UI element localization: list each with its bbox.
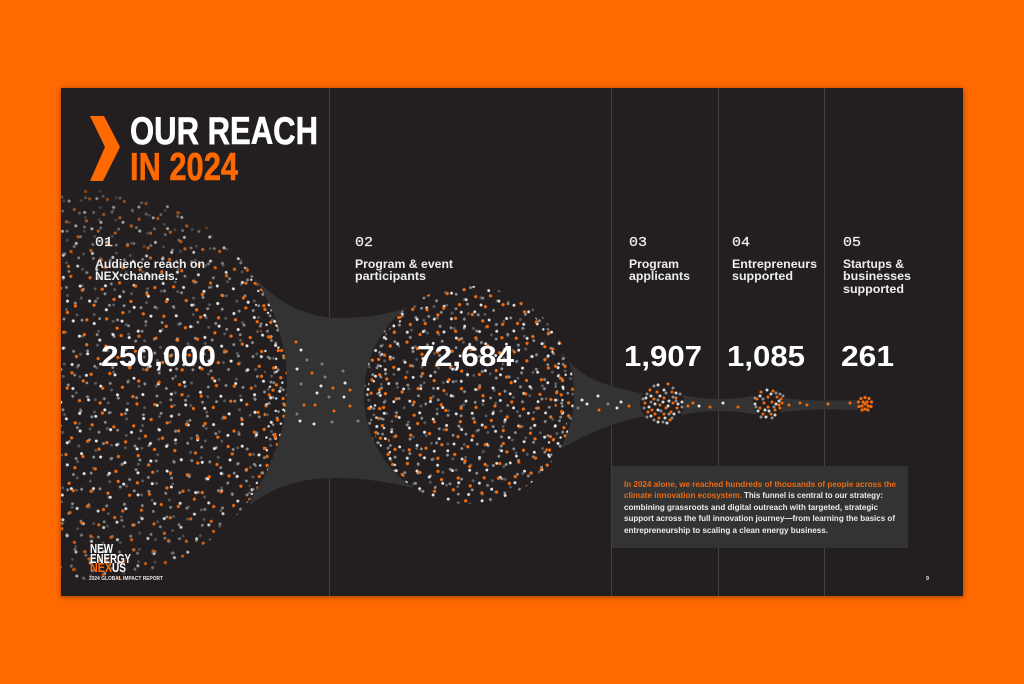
cluster 5: startups supported	[858, 398, 872, 410]
logo: New Energy Nexus: NEX	[90, 560, 112, 575]
cluster 1: audience reach	[61, 190, 287, 580]
figures: 261	[841, 341, 894, 373]
callout panel: This funnel is central to our strategy:	[744, 491, 883, 500]
column 04 label	[732, 235, 817, 283]
figures: 250,000	[101, 341, 216, 373]
column 04 label: supported	[732, 269, 793, 283]
column 01 label	[95, 235, 205, 283]
figures	[101, 341, 894, 373]
figures: 72,684	[417, 341, 514, 373]
column 03 label: applicants	[629, 269, 690, 283]
column 05 label: supported	[843, 282, 904, 296]
figures: 1,085	[727, 341, 805, 373]
footer: page number: 9	[926, 576, 929, 582]
column 02 label: participants	[355, 269, 426, 283]
logo: New Energy Nexus: NEW	[90, 541, 114, 556]
chart: funnel dot clusters	[61, 190, 574, 580]
column 03 label	[629, 235, 690, 283]
column 05 label: Startups &	[843, 257, 904, 271]
column 02 label: Program & event	[355, 257, 453, 271]
dark report panel	[61, 88, 963, 596]
column 01 label: NEX channels.	[95, 269, 178, 283]
figures: 1,907	[624, 341, 702, 373]
callout panel	[612, 466, 908, 548]
column 05 label: businesses	[843, 269, 911, 283]
logo: New Energy Nexus: US	[112, 560, 126, 575]
infographic page	[57, 85, 967, 601]
logo: New Energy Nexus	[90, 541, 131, 575]
cluster 3: program applicants	[640, 381, 684, 425]
dots between clusters 1 and 2	[296, 342, 358, 424]
dots along narrow funnel	[578, 396, 850, 410]
funnel shape	[250, 280, 858, 505]
title	[130, 110, 318, 189]
title: OUR REACH	[130, 110, 318, 153]
column 04 label: Entrepreneurs	[732, 257, 817, 271]
column 03 label: 03	[629, 235, 647, 251]
column 05 label: 05	[843, 235, 861, 251]
logo: New Energy Nexus: ENERGY	[90, 551, 131, 566]
cluster 4: entrepreneurs supported	[753, 388, 783, 418]
column 02 label	[355, 235, 453, 283]
callout panel: support across the full innovation journey—from learning the basics of	[624, 514, 895, 523]
icon: orange chevron	[90, 116, 120, 181]
callout panel: combining grassroots and digital outreach with targeted, strategic	[624, 503, 879, 512]
callout panel: entrepreneurship to scaling a clean energy business.	[624, 526, 828, 535]
column 01 label: 01	[95, 235, 113, 251]
column 01 label: Audience reach on	[95, 257, 205, 271]
cluster 2: program participants	[364, 286, 574, 504]
column 05 label	[843, 235, 911, 296]
footer: report name: 2024 GLOBAL IMPACT REPORT	[89, 576, 164, 582]
title: IN 2024	[130, 146, 238, 189]
column 04 label: 04	[732, 235, 750, 251]
callout panel: In 2024 alone, we reached hundreds of thousands of people across the	[624, 480, 897, 489]
column 03 label: Program	[629, 257, 679, 271]
callout panel: climate innovation ecosystem.	[624, 491, 742, 500]
column 02 label: 02	[355, 235, 373, 251]
